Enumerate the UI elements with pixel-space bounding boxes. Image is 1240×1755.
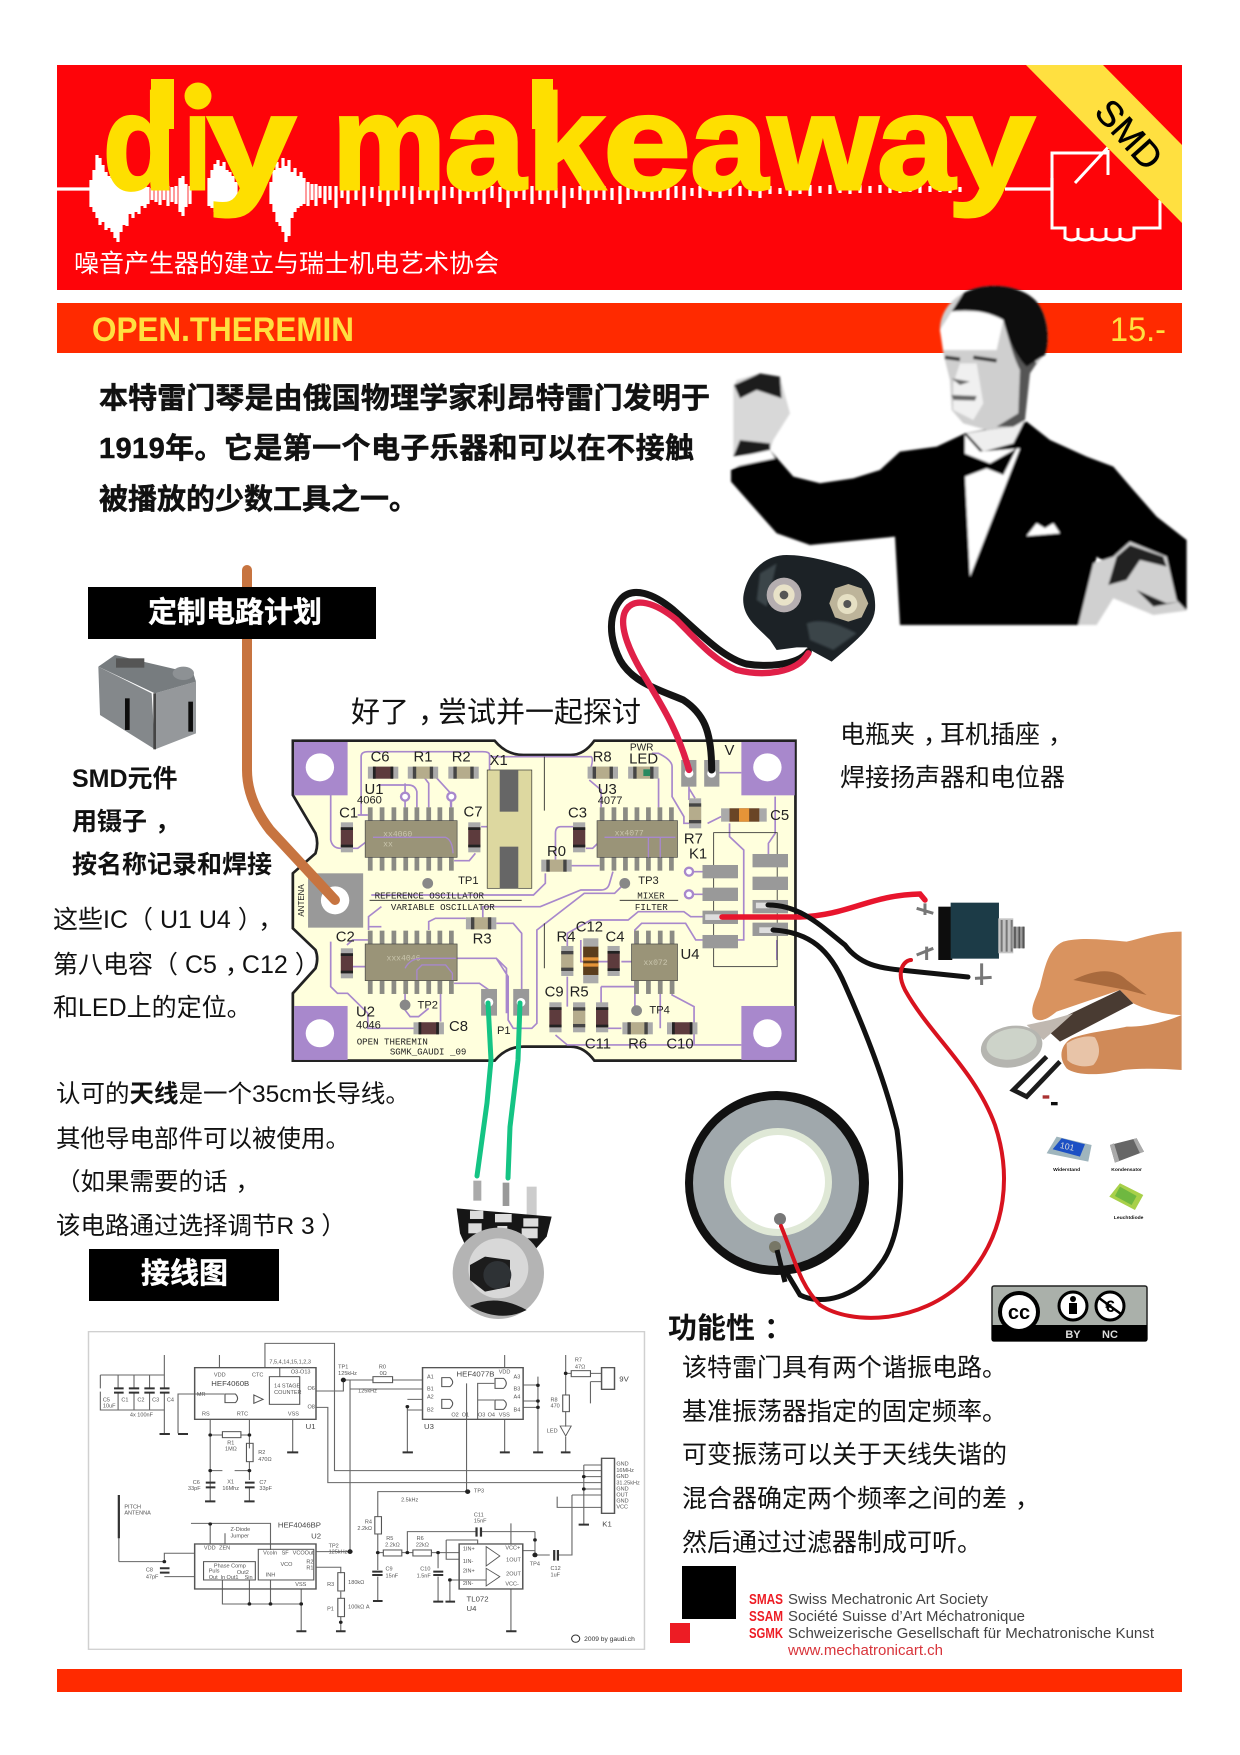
text: antenna note: 认可的天线是一个35cm长导线。 [56,1080,410,1108]
schematic labels: O1 [462,1413,469,1419]
section dividers [370,757,678,968]
title: e [603,67,691,218]
circuit symbol [1052,143,1160,240]
schematic labels: R1 [306,1566,314,1571]
antenna pad: ANTENA [297,884,306,917]
component labels: REFERENCE OSCILLATOR [375,890,485,901]
title [103,67,1035,218]
schematic labels: 16MHz [616,1468,634,1474]
society names: SGMK [749,1626,783,1642]
component labels: OPEN THEREMIN [357,1036,428,1047]
footer bar [57,1669,1182,1692]
title: y [207,67,296,218]
creative commons badge: BY [1065,1329,1081,1341]
creative commons badge: € [1105,1297,1115,1316]
intro paragraph [99,382,710,516]
schematic labels: TL072 [467,1595,489,1604]
schematic labels: U3 [424,1422,434,1431]
text: orientation note: 这些IC（ U1 U4 ） ， [53,906,283,934]
schematic labels: VCC+ [505,1546,520,1551]
component labels [336,743,789,1057]
schematic labels: 2IN- [463,1581,474,1587]
copyright note [572,1635,635,1643]
header banner [57,65,1182,290]
schematic labels: B4 [514,1408,520,1414]
title: d [103,67,176,218]
schematic labels: VSS [295,1582,307,1588]
schematic labels: U1 [306,1422,316,1431]
component labels: PWR [630,743,653,754]
text: clip and jack note: 焊接扬声器和电位器 [840,764,1065,792]
schematic labels: COUNTER [274,1390,302,1396]
schematic labels: X1 [227,1480,234,1485]
heading: custom circuit plan: 定制电路计划 [148,596,322,629]
component labels: TP2 [418,999,438,1011]
solder pads and test points [400,760,719,1016]
schematic labels: VDD [499,1370,511,1375]
traces [331,752,777,1045]
text: orientation note [53,906,320,1022]
component labels: R3 [473,931,492,947]
ground and capacitor bars [114,1388,589,1631]
junction dots [162,1372,586,1624]
schematic labels: 470Ω [258,1457,272,1463]
schematic labels: B1 [427,1387,434,1393]
text: clip and jack note [840,721,1073,792]
schematic labels: O3-O13 [291,1370,311,1375]
schematic labels: LED [547,1429,558,1434]
title: m [332,67,446,218]
IC U1 [365,807,457,871]
schematic labels: K1 [602,1520,612,1529]
text: SMD instructions: SMD元件 [72,765,178,793]
society names: Société Suisse d’Art Méchatronique [788,1608,1025,1625]
component labels: C10 [666,1036,694,1052]
circuit board [293,741,795,1061]
text: SMD instructions [72,765,272,879]
title: w [767,67,879,218]
text: antenna note: 该电路通过选择调节R 3 ） [56,1212,346,1240]
component labels: R1 [414,750,433,766]
text: functionality description: 可变振荡可以关于天线失谐的 [682,1441,1007,1469]
schematic labels: B3 [514,1387,520,1393]
capacitor: Kondensator [1111,1167,1142,1173]
schematic labels: Z-Diode [231,1527,250,1533]
schematic labels: P1 [327,1607,334,1613]
jacket and arm [731,422,1187,625]
schematic labels: 180kΩ [348,1580,364,1586]
schematic labels: R0 [379,1365,386,1371]
photo: potentiometer [453,1181,552,1319]
text: functionality description: 然后通过过滤器制成可听。 [682,1529,982,1557]
potentiometer wires [477,1003,520,1178]
photo: battery clip with wires [611,555,875,770]
intro paragraph: 本特雷门琴是由俄国物理学家利昂特雷门发明于 [99,382,710,415]
raised hand [733,373,790,457]
title: k [527,67,606,218]
schematic labels: VCC [616,1505,628,1511]
society names: SMAS [749,1592,783,1608]
creative commons badge: NC [1102,1329,1118,1341]
schematic labels: RTC [237,1412,248,1418]
component labels: C6 [371,750,390,766]
society names [749,1591,1155,1659]
schematic labels: 22kΩ [416,1543,429,1549]
schematic labels: C5 [103,1398,110,1404]
component labels: U3 [598,782,617,798]
schematic labels: ANTENNA [124,1511,151,1516]
component labels: R4 [556,930,575,946]
photo: piezo speaker [685,960,1004,1318]
schematic labels: RS [202,1412,210,1418]
schematic labels: 1OUT [506,1558,522,1563]
component labels: C5 [770,808,789,824]
surface mount parts [341,767,767,1034]
schematic labels: R8 [551,1398,558,1404]
IC U2: xxx4046 [386,955,421,964]
schematic labels: 7,5,4,14,15,1,2,3 [269,1360,311,1365]
IC U4: xx072 [643,959,668,968]
resistor: Widerstand [1053,1167,1080,1173]
copyright note: 2009 by gaudi.ch [584,1636,635,1643]
schematic labels: ZEN [219,1546,230,1551]
schematic labels: HEF4077B [457,1370,495,1379]
schematic labels: 16Mhz [222,1486,239,1492]
heading: wiring diagram [89,1249,279,1301]
red speaker wire [781,960,1004,1318]
component labels: C1 [339,805,358,821]
schematic labels: VCO [280,1562,292,1568]
component labels: VARIABLE OSCILLATOR [391,902,495,913]
schematic labels: GND [616,1487,629,1492]
product name: OPEN.THEREMIN [92,311,354,349]
component labels: C11 [585,1036,611,1052]
schematic labels: SF [282,1551,289,1556]
schematic labels: INH [266,1573,275,1579]
schematic labels: VSS [288,1412,299,1418]
schematic labels: C11 [474,1513,484,1519]
schematic wiring [100,1343,602,1631]
heading: functionality: 功能性 ： [668,1312,793,1345]
component labels: TP1 [458,875,479,887]
schematic labels: 33pF [188,1486,201,1492]
schematic labels: R1 [227,1441,234,1446]
schematic labels: CTC [252,1373,264,1379]
schematic labels: HEF4060B [211,1379,249,1388]
schematic labels [103,1358,640,1613]
text: functionality description: 混合器确定两个频率之间的差 ， [682,1485,1040,1513]
IC U3 [597,807,677,871]
schematic labels: GND [616,1474,629,1480]
black speaker wire [773,930,901,1300]
IC U3: xx4077 [615,830,644,839]
schematic labels: VSS [499,1413,510,1419]
schematic labels: MR [197,1392,206,1398]
schematic labels: VcoIn [263,1551,277,1556]
schematic labels: O6 [307,1386,315,1392]
component labels: 4060 [357,794,382,806]
component labels: P1 [497,1025,511,1037]
schematic labels: OUT [616,1493,629,1498]
schematic labels: 1.5nF [417,1574,431,1579]
schematic labels: 4x 100nF [130,1413,153,1419]
component labels: U4 [681,947,700,963]
schematic labels: Out [209,1575,218,1581]
IC U4 [632,931,677,994]
society names: SSAM [749,1609,783,1625]
society names: Schweizerische Gesellschaft für Mechatronische Kunst [788,1625,1155,1642]
component labels: R8 [593,750,612,766]
schematic labels: 1IN+ [463,1547,475,1553]
schematic labels: 125kHz [329,1550,348,1555]
text: functionality description [682,1354,1040,1557]
caption: try and explore: 好了 ，尝试并一起探讨 [351,696,641,729]
component labels: R5 [570,985,589,1001]
schematic labels: 125kHz [358,1389,377,1395]
component labels: C2 [336,930,355,946]
schematic labels: C10 [420,1567,431,1573]
society names: Swiss Mechatronic Art Society [788,1591,988,1608]
schematic labels: TP1 [338,1365,348,1370]
schematic labels: GND [616,1462,629,1468]
component labels: 4077 [598,795,623,807]
schematic labels: 2.2kΩ [385,1543,400,1549]
schematic labels: HEF4046BP [278,1521,321,1529]
SMD part examples [1047,1137,1144,1221]
component labels: X1 [490,753,508,769]
schematic labels: Out2 [237,1570,249,1576]
schematic labels: 15nF [474,1519,487,1525]
LED: Leuchtdiode [1114,1215,1144,1221]
heading: custom circuit plan [88,570,376,900]
intro paragraph: 1919年。它是第一个电子乐器和可以在不接触 [99,432,694,465]
schematic labels: A2 [427,1395,434,1401]
schematic labels: VCC- [505,1582,519,1588]
society logo squares [670,1566,736,1643]
schematic labels: 2IN+ [463,1569,475,1574]
schematic labels: 125kHz [338,1371,357,1377]
SMD ribbon: SMD [1087,91,1171,178]
schematic labels: C9 [386,1567,393,1573]
creative commons badge: cc [1008,1302,1030,1324]
schematic labels: O3 [478,1413,485,1419]
schematic labels: O2 [451,1413,459,1419]
schematic labels: Phase Comp [214,1564,246,1569]
component labels: U2 [356,1005,375,1021]
schematic labels: O8 [307,1405,315,1410]
schematic labels: 2OUT [506,1572,522,1578]
schematic labels: 47pF [146,1575,158,1580]
schematic labels: 470 [551,1404,560,1410]
crystal X1 [487,770,532,888]
schematic labels: 2.2kΩ [357,1526,372,1532]
schematic labels: 31.25kHz [616,1481,640,1486]
component labels: C12 [576,920,603,936]
component labels: R7 [684,831,703,847]
component labels: TP4 [649,1004,670,1016]
schematic labels: A3 [514,1375,520,1381]
component labels: TP3 [638,875,659,887]
component labels: MIXER [637,890,665,901]
schematic labels: PITCH [124,1505,141,1510]
price: 15.- [1110,311,1166,349]
schematic labels: U2 [311,1532,321,1540]
schematic labels: Out1 [226,1575,239,1581]
schematic labels: R2 [306,1560,314,1565]
text: clip and jack note: 电瓶夹 ，耳机插座 ， [840,721,1073,749]
text: orientation note: 第八电容（ C5 ，C12 ） [53,951,320,979]
schematic labels: B2 [427,1408,434,1414]
title bar [57,303,1182,353]
subtitle: 噪音产生器的建立与瑞士机电艺术协会 [74,250,499,278]
schematic labels: 14 STAGE [274,1384,301,1389]
component labels: K1 [689,846,707,862]
schematic labels: O4 [488,1413,495,1419]
schematic labels: 33pF [259,1486,272,1492]
schematic diagram [89,1332,644,1649]
text: orientation note: 和LED上的定位。 [53,994,252,1022]
schematic chips [195,1368,615,1617]
mounting corners [294,742,795,1060]
IC U1: xx4060 [383,831,412,840]
schematic labels: Puls [209,1569,220,1575]
schematic labels: A4 [514,1395,520,1401]
component labels: FILTER [635,902,668,913]
component labels: SGMK_GAUDI _09 [390,1046,466,1057]
schematic labels: C8 [146,1568,153,1574]
text: functionality description: 该特雷门具有两个谐振电路。 [682,1354,1007,1382]
schematic labels: 1uF [551,1573,560,1579]
schematic labels: 47Ω [575,1365,585,1371]
connector K1 [702,833,788,967]
title: a [877,67,956,218]
schematic labels: VDD [214,1373,226,1379]
shirt front [965,421,1025,577]
schematic labels: 1IN- [463,1559,474,1565]
pocket square [1027,523,1060,536]
antenna wire [247,570,335,900]
red signal wire [722,894,925,917]
speaker and jack wiring [722,894,968,1300]
schematic labels: R5 [386,1536,393,1542]
schematic labels: 1MΩ [225,1447,237,1453]
schematic labels: Jumper [231,1534,249,1539]
schematic labels: 0Ω [380,1371,387,1377]
schematic labels: C6 [193,1480,200,1486]
resistor: 101 [1059,1140,1076,1153]
schematic labels: In [221,1575,225,1581]
component labels: U1 [364,782,383,798]
component labels: LED [629,751,658,767]
schematic labels: VDD [204,1546,216,1551]
schematic labels: R4 [365,1520,372,1525]
component labels: R2 [452,750,471,766]
SMD ribbon [1026,65,1182,223]
schematic labels: Sin [245,1575,253,1581]
component labels: R6 [628,1036,647,1052]
schematic labels: R7 [575,1358,582,1364]
schematic labels: 10uF [103,1404,116,1409]
lower hand [1078,542,1187,625]
head [940,286,1048,430]
IC U2 [365,931,457,994]
schematic labels: R2 [258,1450,265,1456]
component labels: C9 [545,985,564,1001]
title: a [444,67,527,218]
schematic labels: 9V [619,1375,629,1384]
schematic labels: TP4 [530,1562,540,1567]
component labels: C8 [449,1019,468,1035]
bow tie [960,448,1017,477]
schematic labels: C3 [152,1398,159,1404]
waveform [57,155,960,242]
title: a [690,67,769,218]
schematic labels: C4 [167,1398,174,1404]
schematic labels: A1 [427,1375,434,1381]
schematic labels: C12 [551,1566,561,1572]
schematic labels: GND [616,1499,629,1504]
schematic labels: C7 [259,1480,267,1486]
photo: hand with tweezers and magnifier [978,932,1182,1105]
component labels: C3 [568,805,587,821]
text: antenna note: （如果需要的话 ， [56,1168,260,1196]
component labels: C4 [605,930,624,946]
creative commons badge [992,1286,1147,1341]
photo: theremin inventor [731,286,1187,625]
society names: www.mechatronicart.ch [787,1642,943,1659]
icon: SMD component box [98,655,196,749]
schematic labels: VCOOut [293,1551,314,1556]
schematic labels: TP3 [474,1489,484,1495]
schematic labels: C2 [137,1398,144,1404]
text: antenna note: 其他导电部件可以被使用。 [56,1125,350,1153]
antenna pad [297,873,363,928]
schematic labels: U4 [467,1604,476,1613]
title: y [947,67,1035,218]
schematic labels: 100kΩ A [348,1605,370,1610]
intro paragraph: 被播放的少数工具之一。 [99,483,418,516]
black ground wire [768,905,968,977]
IC U1: xx [383,841,393,850]
schematic labels: R6 [417,1536,424,1542]
resistor [1047,1137,1092,1173]
schematic labels: 2.5kHz [401,1498,419,1503]
component labels: C7 [464,805,483,821]
component labels: R0 [547,844,566,860]
text: SMD instructions: 按名称记录和焊接 [72,851,272,879]
text: functionality description: 基准振荡器指定的固定频率。 [682,1398,1007,1426]
component labels: V [724,743,735,759]
photo: audio jack [917,903,1025,985]
text: antenna note [56,1080,410,1240]
schematic labels: C1 [121,1398,129,1404]
schematic labels: R3 [327,1582,334,1588]
heading: wiring diagram: 接线图 [141,1257,228,1290]
schematic labels: 15nF [386,1574,398,1579]
component labels: 4046 [356,1019,381,1031]
schematic labels: TP2 [329,1544,339,1549]
title: i [184,67,211,218]
text: SMD instructions: 用镊子 ， [72,808,180,836]
